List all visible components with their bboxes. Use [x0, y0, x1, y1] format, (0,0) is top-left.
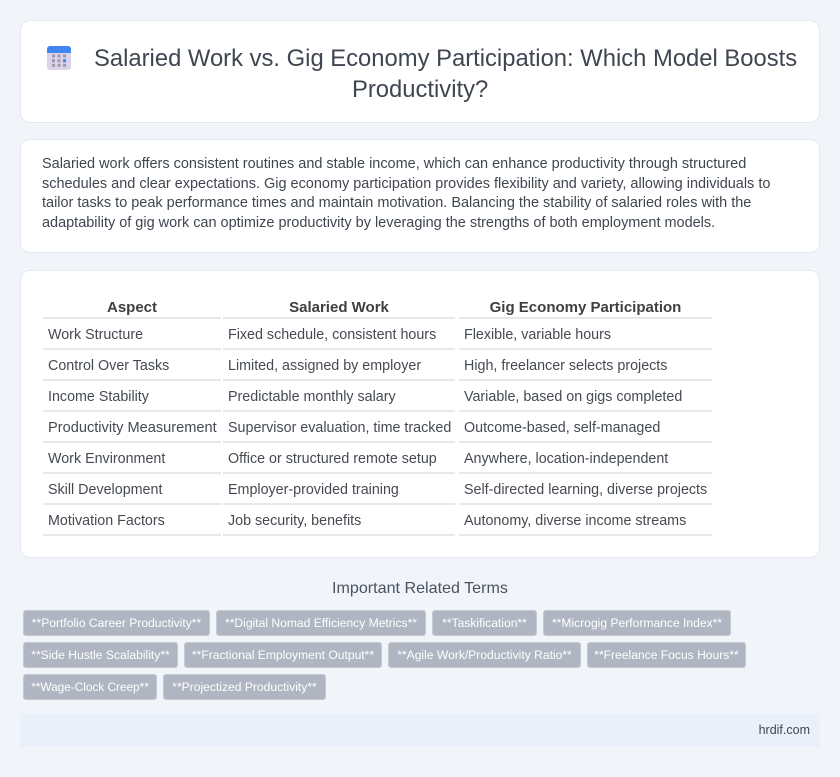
footer bar — [20, 713, 820, 747]
intro panel — [20, 139, 820, 253]
header: Gig Economy Participation: Gig Economy Participation — [490, 299, 681, 316]
tag: **Agile Work/Productivity Ratio** — [397, 648, 572, 662]
intro text: schedules and clear expectations. Gig economy participation provides flexibility and variety, allowing individuals to — [42, 176, 770, 192]
tag — [388, 642, 581, 668]
row: Work Environment: Work Environment — [48, 451, 165, 467]
title line 1: Salaried Work vs. Gig Economy Participation: Which Model Boosts — [94, 45, 797, 72]
table: Limited, assigned by employer — [228, 358, 421, 374]
intro text: Salaried work offers consistent routines and stable income, which can enhance productivity through structured — [42, 156, 746, 172]
tag — [216, 610, 426, 636]
tag — [23, 642, 178, 668]
related terms heading: Important Related Terms — [332, 579, 508, 597]
table: Supervisor evaluation, time tracked — [228, 420, 451, 436]
source label: hrdif.com — [759, 723, 810, 737]
row: Control Over Tasks: Control Over Tasks — [48, 358, 169, 374]
header panel — [20, 20, 820, 123]
table: Predictable monthly salary — [228, 389, 396, 405]
intro text: tailor tasks to peak performance times and maintain motivation. Balancing the stability of salaried roles with the — [42, 195, 751, 211]
title — [94, 45, 797, 103]
tag — [432, 610, 537, 636]
tag — [163, 674, 326, 700]
table: Job security, benefits — [228, 513, 361, 529]
tag: **Projectized Productivity** — [172, 680, 317, 694]
intro text — [42, 156, 770, 230]
table: Outcome-based, self-managed — [464, 420, 660, 436]
header: Aspect: Aspect — [107, 299, 157, 316]
tag — [184, 642, 382, 668]
tag — [587, 642, 746, 668]
table — [43, 299, 712, 536]
tag: **Taskification** — [442, 616, 527, 630]
title line 2: Productivity? — [352, 76, 488, 103]
tag — [23, 674, 157, 700]
related terms tags — [23, 610, 746, 700]
table: Variable, based on gigs completed — [464, 389, 682, 405]
tag: **Wage-Clock Creep** — [31, 680, 149, 694]
tag: **Digital Nomad Efficiency Metrics** — [225, 616, 417, 630]
table: Anywhere, location-independent — [464, 451, 668, 467]
tag — [543, 610, 731, 636]
table: Self-directed learning, diverse projects — [464, 482, 707, 498]
intro text: adaptability of gig work can optimize productivity by leveraging the strengths of both employment models. — [42, 214, 715, 230]
tag — [23, 610, 210, 636]
row: Motivation Factors: Motivation Factors — [48, 513, 165, 529]
table: Employer-provided training — [228, 482, 399, 498]
header: Salaried Work: Salaried Work — [289, 299, 389, 316]
tag: **Fractional Employment Output** — [192, 648, 374, 662]
row: Skill Development: Skill Development — [48, 482, 162, 498]
row: Productivity Measurement: Productivity Measurement — [48, 420, 217, 436]
table: Flexible, variable hours — [464, 327, 611, 343]
table: High, freelancer selects projects — [464, 358, 667, 374]
row: Income Stability: Income Stability — [48, 389, 149, 405]
tag: **Microgig Performance Index** — [552, 616, 722, 630]
table: Office or structured remote setup — [228, 451, 437, 467]
table: Fixed schedule, consistent hours — [228, 327, 436, 343]
comparison table panel — [20, 270, 820, 558]
table: Autonomy, diverse income streams — [464, 513, 686, 529]
tag: **Portfolio Career Productivity** — [32, 616, 201, 630]
icon: calendar — [47, 46, 71, 70]
tag: **Side Hustle Scalability** — [31, 648, 170, 662]
tag: **Freelance Focus Hours** — [594, 648, 739, 662]
row: Work Structure: Work Structure — [48, 327, 143, 343]
